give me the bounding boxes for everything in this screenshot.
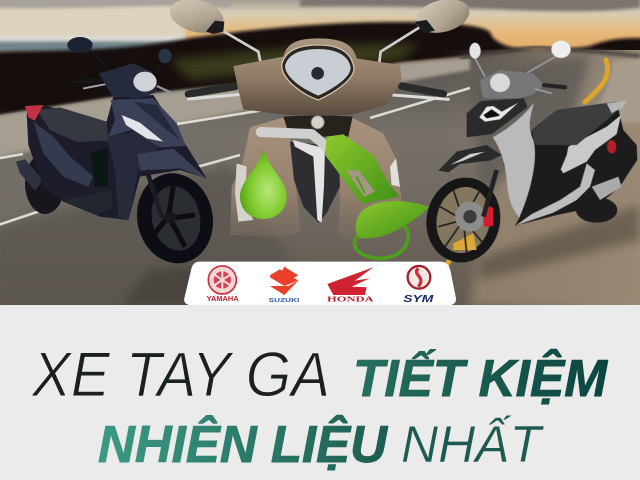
- guardrail: [460, 47, 640, 58]
- front fairing: [108, 98, 186, 147]
- silver shield: [493, 103, 535, 217]
- fork: [147, 170, 162, 218]
- head: [480, 70, 544, 98]
- front wheel: [129, 166, 221, 270]
- handlebar grip: [544, 85, 565, 87]
- bike silhouette: [503, 102, 637, 226]
- seat: [37, 107, 108, 142]
- title line 2: NHIÊN LIỆU: [98, 415, 388, 474]
- title line 1: TIẾT KIỆM: [353, 349, 609, 408]
- scooter: center beige Yamaha front view: [166, 0, 473, 305]
- body silhouette: [27, 95, 207, 220]
- head: [99, 63, 157, 98]
- front wheel: [419, 171, 508, 269]
- right shoulder: [590, 58, 640, 122]
- sky: [0, 0, 640, 65]
- Honda logo: [327, 267, 374, 304]
- fuel nozzle: [325, 134, 399, 204]
- grips: [188, 86, 448, 99]
- muffler: [16, 159, 43, 191]
- dark hills: [0, 22, 640, 116]
- dark front panel: [467, 98, 527, 137]
- central grille: [290, 142, 340, 223]
- fuel nozzle spout: [261, 132, 327, 147]
- white lane lines: [0, 88, 470, 226]
- seat: [532, 102, 617, 145]
- icon: fuel drop: [240, 148, 287, 219]
- red tail: [25, 105, 43, 121]
- handlebar: [74, 80, 100, 82]
- chrome T: [293, 140, 325, 223]
- mirrors: [67, 37, 172, 71]
- mirror left: [166, 0, 261, 63]
- rear wheel: [576, 197, 617, 223]
- fork: [483, 170, 497, 217]
- right shield: [337, 117, 402, 245]
- rear side panel: [33, 122, 93, 187]
- rear silver swoosh: [561, 115, 621, 173]
- emblem: [311, 116, 324, 129]
- SYM logo: SYM: [403, 294, 434, 305]
- title line 1: [30, 340, 609, 410]
- mirror right: [379, 0, 473, 63]
- SYM logo: [403, 266, 434, 305]
- Suzuki logo: SUZUKI: [269, 298, 300, 304]
- engine cover: [592, 177, 622, 200]
- Suzuki logo: [269, 267, 300, 304]
- scooter: left dark blue Suzuki: [16, 37, 221, 270]
- fender: [438, 145, 502, 172]
- brand logos panel: [184, 262, 456, 305]
- side lamps: [235, 163, 253, 222]
- Honda logo: HONDA: [327, 296, 374, 304]
- Yamaha logo: [207, 266, 239, 303]
- road surface: [0, 50, 640, 306]
- headlight: [282, 45, 354, 100]
- fender: [137, 148, 207, 179]
- background photo: sunset road: [0, 0, 640, 306]
- far pale road band: [0, 57, 470, 158]
- headlight: [133, 72, 157, 92]
- bike shadows: [120, 265, 300, 306]
- lower silver strip: [516, 163, 595, 225]
- rear wheel: [25, 153, 65, 214]
- icon: leaf: [355, 201, 429, 258]
- mirrors: [469, 41, 571, 77]
- black collar: [283, 115, 353, 137]
- taillight: [607, 140, 616, 153]
- title line 2: [98, 415, 544, 474]
- Yamaha logo: YAMAHA: [207, 296, 239, 303]
- yellow lane line: [445, 60, 608, 268]
- scooter: right silver Honda SH: [419, 41, 637, 269]
- handlebar cover: [233, 38, 402, 115]
- headlight: [490, 73, 510, 92]
- title panel: [0, 305, 640, 480]
- left shield: [230, 117, 301, 237]
- title line 2: NHẤT: [401, 415, 544, 474]
- title line 1: XE TAY GA: [30, 340, 330, 410]
